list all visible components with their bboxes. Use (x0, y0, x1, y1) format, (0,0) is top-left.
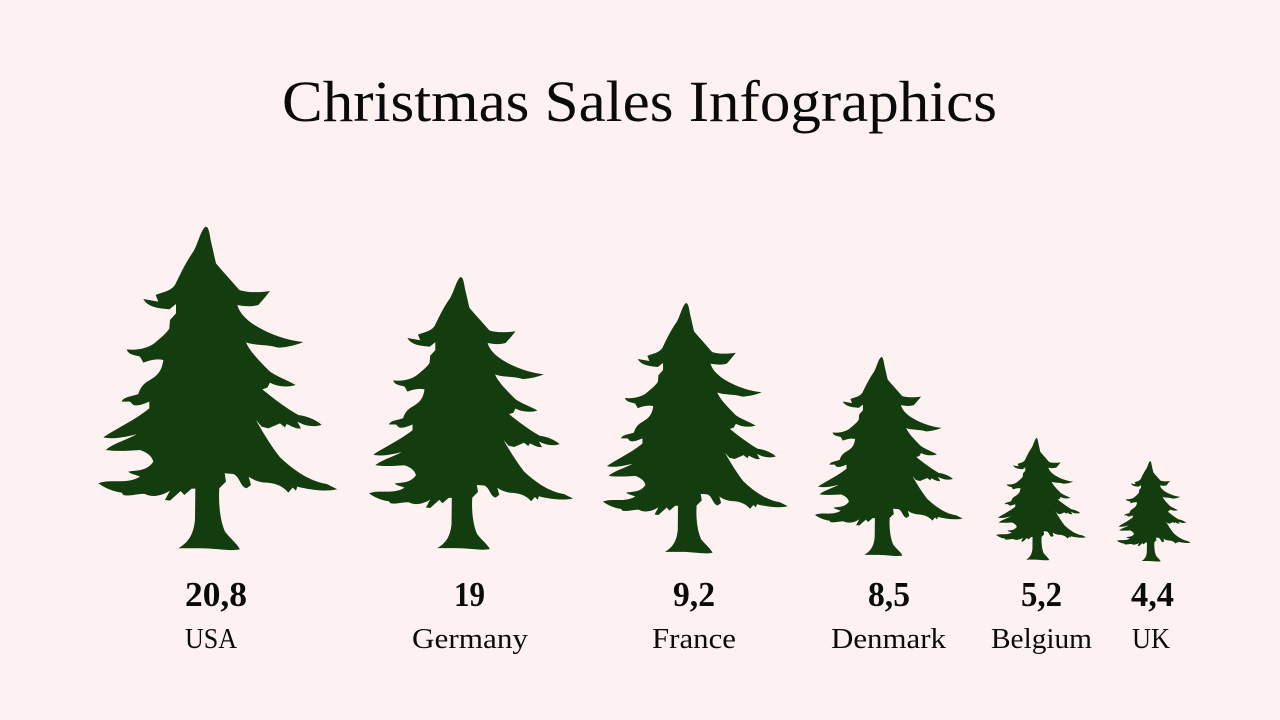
label: Belgium: Belgium (991, 623, 1092, 655)
title: Christmas Sales Infographics (282, 69, 997, 134)
label: USA: USA (185, 623, 237, 655)
value: USA: 20,8 (185, 575, 247, 614)
icon: tree UK (1117, 461, 1191, 562)
label: Germany: Germany (412, 623, 529, 655)
label: Denmark: Denmark (831, 623, 947, 655)
value: France: 9,2 (673, 575, 715, 614)
label: UK: UK (1132, 623, 1170, 655)
label: France: France (652, 623, 736, 655)
value: Denmark: 8,5 (868, 575, 910, 614)
icon: tree Germany (369, 277, 573, 550)
icon: tree Denmark (815, 357, 963, 556)
icon: tree France (603, 303, 788, 553)
value: UK: 4,4 (1131, 575, 1174, 614)
icon: tree Belgium (996, 438, 1086, 560)
value: Germany: 19 (454, 575, 485, 614)
icon: tree USA (98, 227, 337, 550)
value: Belgium: 5,2 (1021, 575, 1062, 614)
